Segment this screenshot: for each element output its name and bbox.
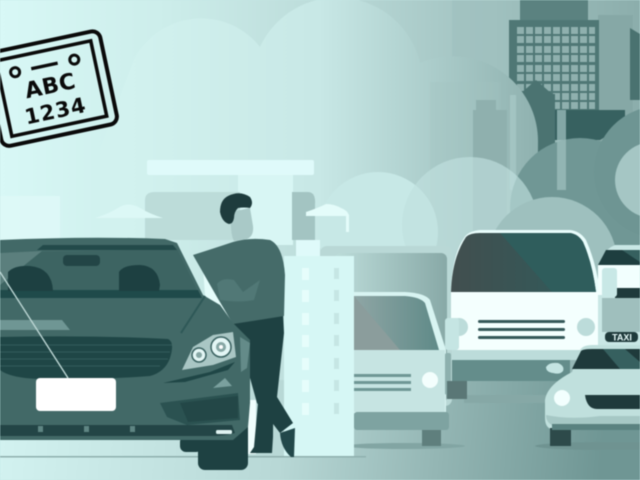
truck behind <box>320 246 452 406</box>
taxi <box>535 332 640 450</box>
sweater <box>193 239 285 324</box>
back skyline <box>452 0 640 170</box>
floor <box>0 380 640 480</box>
back leg and shoe <box>250 330 274 453</box>
left distant buildings <box>0 160 349 246</box>
lower grille <box>160 393 240 425</box>
head <box>220 193 253 241</box>
back right van <box>598 245 640 345</box>
icon: licence plate: 1234 <box>23 93 89 129</box>
grille <box>0 336 172 379</box>
front shoe <box>280 428 295 457</box>
plate <box>36 378 116 411</box>
side panel <box>240 337 250 372</box>
seats <box>119 265 160 291</box>
icon: licence plate <box>0 30 118 147</box>
taxi sign <box>605 332 638 342</box>
upper cloud bank <box>100 0 538 240</box>
headlight <box>182 332 236 370</box>
lower clouds <box>318 172 438 292</box>
body <box>0 238 250 440</box>
hood prop line <box>0 272 68 378</box>
folded arm <box>217 279 260 302</box>
light gap behind car <box>203 268 232 322</box>
ground line <box>0 456 366 458</box>
bus <box>445 230 600 403</box>
car <box>0 238 250 470</box>
icon: licence plate: ABC <box>23 69 78 104</box>
windshield <box>0 249 197 290</box>
tyres <box>198 420 248 470</box>
small van <box>345 292 465 449</box>
office tower <box>509 0 599 120</box>
front trousers <box>233 313 293 433</box>
taxi sign: TAXI <box>612 332 632 342</box>
man <box>193 193 295 457</box>
clouds <box>100 0 640 327</box>
dark clouds <box>510 138 640 278</box>
hood highlight <box>0 320 70 330</box>
bumper strip <box>0 425 235 436</box>
foreground building <box>284 240 354 456</box>
